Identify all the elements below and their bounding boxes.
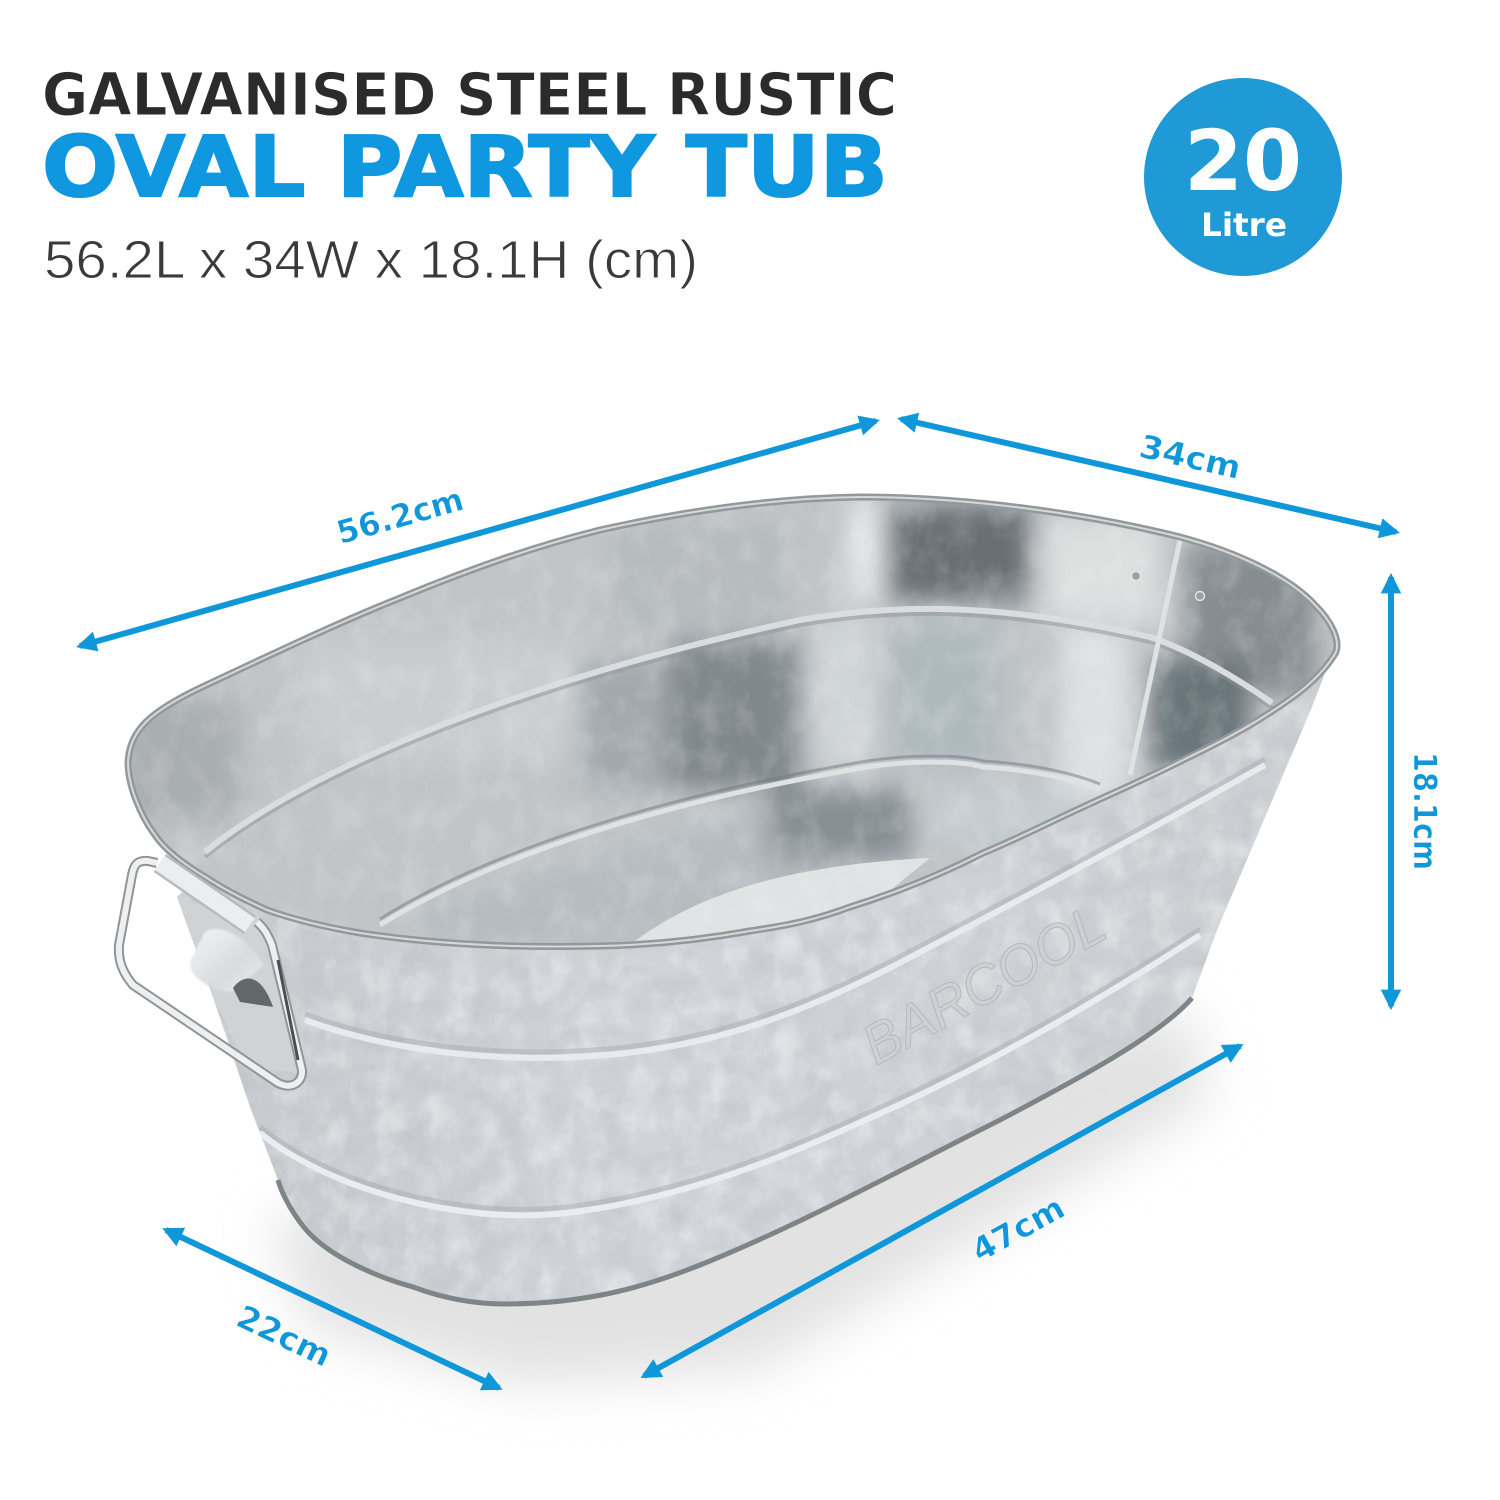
title: GALVANISED STEEL RUSTIC xyxy=(42,60,897,129)
arrow: height xyxy=(1388,577,1394,1006)
tub xyxy=(100,480,1360,1320)
dimensions subtitle: 56.2L x 34W x 18.1H (cm) xyxy=(44,230,698,290)
label: 34cm: 34cm xyxy=(1136,427,1245,487)
rivets xyxy=(1132,572,1204,600)
title: OVAL PARTY TUB xyxy=(42,118,888,216)
rim and interior xyxy=(100,480,1360,960)
capacity badge: Litre xyxy=(1201,206,1287,244)
label: 56.2cm: 56.2cm xyxy=(332,480,468,552)
label: 47cm: 47cm xyxy=(965,1188,1071,1270)
label: 22cm: 22cm xyxy=(231,1297,337,1375)
handle rod xyxy=(119,861,302,1086)
label: 18.1cm: 18.1cm xyxy=(1406,752,1444,870)
seam xyxy=(1130,540,1180,775)
arrow: base width xyxy=(166,1230,499,1388)
handle mounting plate xyxy=(177,897,300,1073)
body galvanised mottling xyxy=(178,704,1309,1298)
tub interior xyxy=(132,500,1334,943)
bottle opener lever xyxy=(190,929,264,992)
body ribs xyxy=(260,759,1265,1215)
arrow: base length xyxy=(644,1046,1240,1376)
capacity badge: 20 xyxy=(1184,112,1302,210)
arrow: width top xyxy=(901,419,1396,532)
handle sleeve xyxy=(160,863,250,925)
tub outer body xyxy=(177,660,1330,1304)
handle xyxy=(119,861,302,1086)
dimension arrows xyxy=(80,419,1396,1388)
rolled rim xyxy=(128,497,1337,947)
capacity badge xyxy=(1144,78,1342,276)
embossed brand: BARCOOL xyxy=(851,891,1116,1076)
dimension labels xyxy=(231,427,1444,1375)
title xyxy=(42,60,897,216)
interior ribs xyxy=(205,540,1272,925)
bottom rim xyxy=(278,998,1192,1304)
floor shadow xyxy=(270,1010,1210,1385)
arrow: length top xyxy=(80,421,876,646)
